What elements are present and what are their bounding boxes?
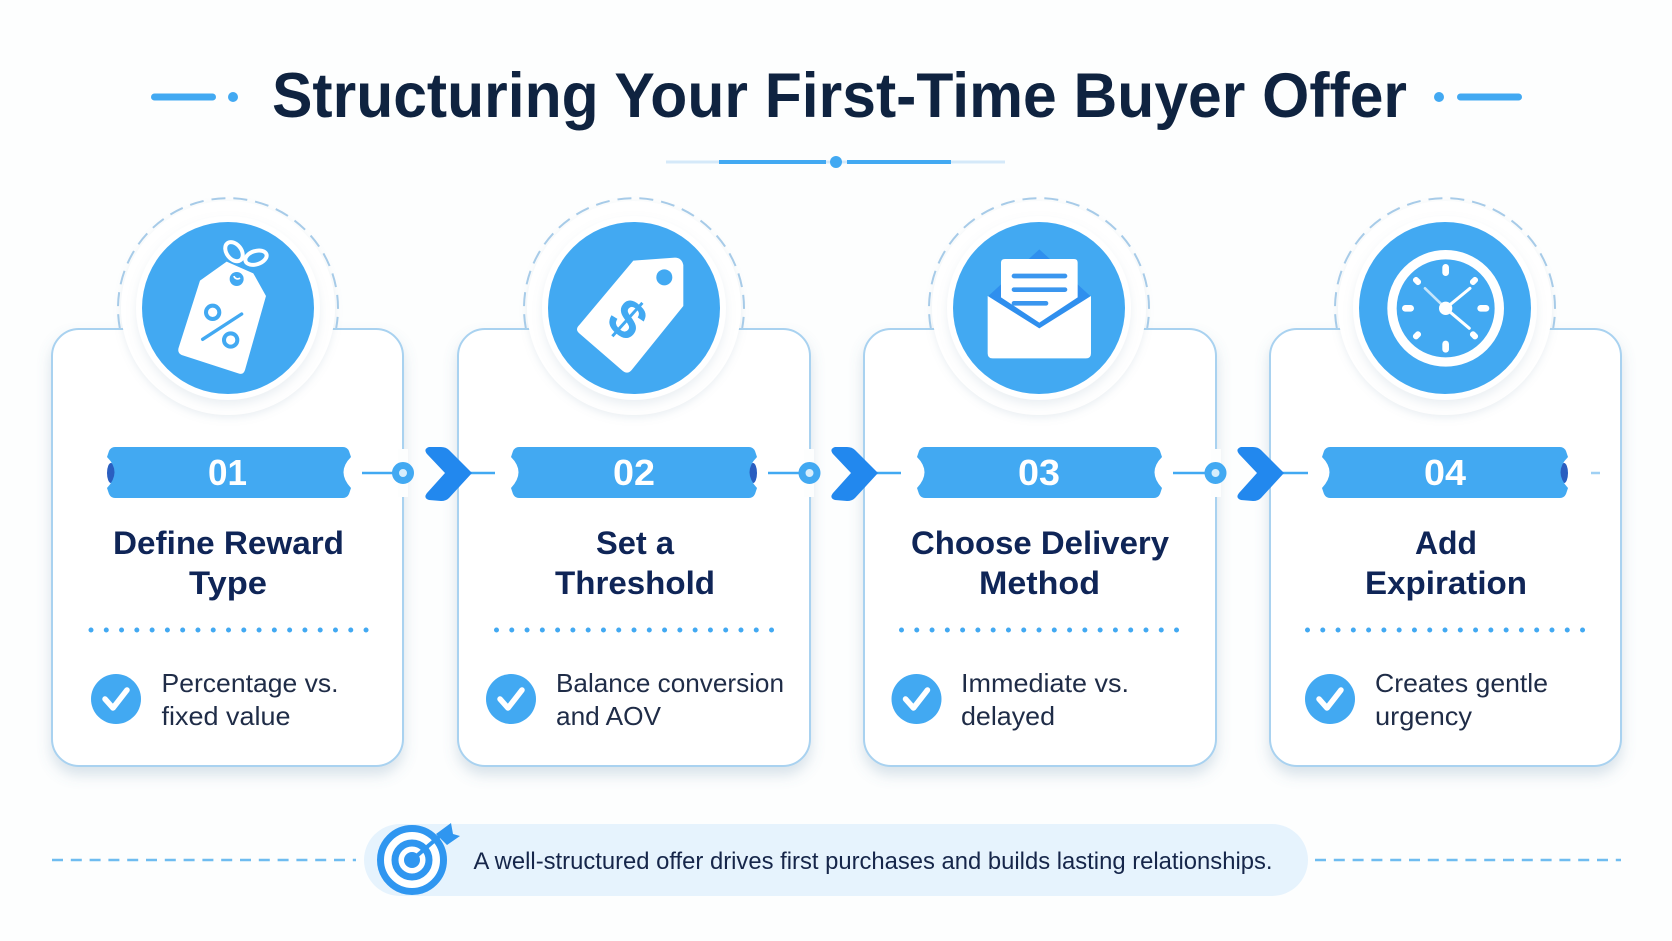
step text 2: Balance conversion — [556, 668, 784, 698]
step heading 4: Expiration — [1365, 565, 1527, 601]
step heading 2: Threshold — [555, 565, 715, 601]
icon: clock — [1392, 255, 1499, 362]
panel: step 3 — [864, 198, 1216, 766]
title divider — [666, 156, 1005, 168]
step text 4: Creates gentle — [1375, 668, 1548, 698]
step text 2: and AOV — [556, 701, 662, 731]
dotted divider 2 — [496, 628, 773, 632]
step text 4 — [1375, 668, 1548, 731]
arrow: step 2 to 3 — [768, 447, 901, 501]
title ornament: left — [151, 92, 238, 102]
arrow: step 3 to 4 — [1173, 447, 1308, 501]
panel: step 1 — [52, 198, 403, 766]
step heading 1: Type — [189, 565, 267, 601]
card 4 — [1270, 329, 1621, 766]
step heading 1 — [113, 525, 344, 601]
panel: step 2 — [458, 198, 810, 766]
callout background — [364, 824, 1308, 896]
icon: percent tag — [178, 239, 269, 374]
icon: check 1 — [91, 674, 141, 724]
number ribbon 04 — [1322, 447, 1568, 498]
step heading 3: Method — [979, 565, 1100, 601]
card 2 — [458, 329, 810, 766]
step heading 2 — [555, 525, 715, 601]
number ribbon 01 — [107, 447, 351, 498]
card 1 — [52, 329, 403, 766]
icon: target — [380, 823, 460, 892]
callout — [364, 823, 1308, 896]
step heading 4 — [1365, 525, 1527, 601]
medallion 2 — [524, 198, 744, 415]
step text 3: Immediate vs. — [961, 668, 1129, 698]
dotted divider 4 — [1308, 628, 1584, 632]
step heading 1: Define Reward — [113, 525, 344, 561]
step text 3 — [961, 668, 1129, 731]
step text 2 — [556, 668, 784, 731]
step heading 2: Set a — [596, 525, 674, 561]
title: Structuring Your First-Time Buyer Offer — [272, 61, 1407, 131]
step text 4: urgency — [1375, 701, 1472, 731]
number ribbon 03: 03 — [1018, 452, 1060, 493]
dashed line: right — [1315, 859, 1621, 861]
step heading 3 — [911, 525, 1169, 601]
step heading 4: Add — [1415, 525, 1477, 561]
step text 3: delayed — [961, 701, 1055, 731]
icon: check 4 — [1305, 674, 1355, 724]
dotted divider 1 — [91, 628, 368, 632]
callout text: A well-structured offer drives first purchases and builds lasting relationships. — [474, 848, 1272, 875]
dotted divider 3 — [902, 628, 1178, 632]
connector stub after step 4 — [1591, 472, 1600, 474]
icon: check 2 — [486, 674, 536, 724]
card 3 — [864, 329, 1216, 766]
step heading 3: Choose Delivery — [911, 525, 1169, 561]
panel: step 4 — [1270, 198, 1621, 766]
title ornament: right — [1434, 92, 1522, 102]
medallion 4 — [1335, 198, 1555, 415]
icon: dollar tag: $ — [596, 286, 660, 352]
arrow: step 1 to 2 — [362, 447, 495, 501]
step text 1: fixed value — [162, 701, 290, 731]
number ribbon 04: 04 — [1424, 452, 1466, 493]
icon: dollar tag — [577, 258, 683, 373]
step text 1 — [162, 668, 338, 731]
number ribbon 01: 01 — [208, 452, 247, 493]
icon: envelope — [988, 249, 1091, 358]
medallion 3 — [929, 198, 1149, 415]
medallion 1 — [118, 198, 338, 415]
icon: check 3 — [892, 674, 942, 724]
number ribbon 02: 02 — [613, 452, 655, 493]
number ribbon 03 — [917, 447, 1162, 498]
dashed line: left — [52, 859, 356, 861]
step text 1: Percentage vs. — [162, 668, 338, 698]
number ribbon 02 — [511, 447, 757, 498]
